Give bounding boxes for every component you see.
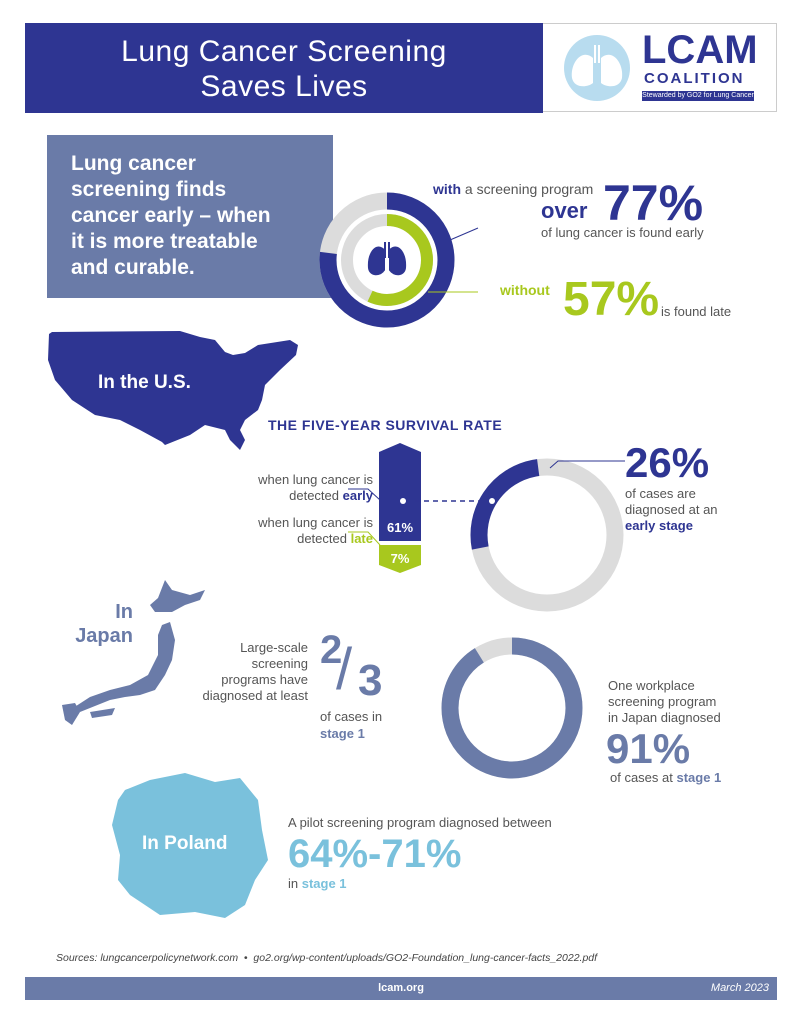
logo: Stewarded by GO2 for Lung Cancer (642, 92, 754, 99)
logo: COALITION (644, 70, 744, 87)
91% text: in Japan diagnosed (608, 710, 721, 725)
26% text (625, 439, 718, 533)
survival bar: 61% (387, 520, 413, 535)
26% text: of cases are (625, 486, 696, 501)
early label: detected early (289, 488, 373, 503)
Poland text: A pilot screening program diagnosed between (288, 815, 552, 830)
title: Saves Lives (200, 70, 368, 103)
91% text: screening program (608, 694, 716, 709)
Poland text: in stage 1 (288, 876, 347, 891)
26% text: diagnosed at an (625, 502, 718, 517)
with text: of lung cancer is found early (541, 225, 704, 240)
footer: March 2023 (711, 982, 769, 994)
26% text: early stage (625, 518, 693, 533)
text: 2 (320, 628, 342, 672)
survival heading: THE FIVE-YEAR SURVIVAL RATE (268, 417, 502, 433)
intro box: Lung cancer screening finds cancer early – when it is more treatable and curable. (71, 152, 271, 279)
title (25, 23, 543, 113)
title: Lung Cancer Screening (121, 35, 447, 68)
text: stage 1 (320, 726, 365, 741)
2/3 text: Large-scale screening programs have diagnosed at least (202, 640, 308, 703)
Poland text: 64%-71% (288, 832, 461, 876)
without text (500, 273, 731, 326)
logo: LCAM (642, 28, 758, 72)
logo (564, 28, 758, 101)
without text: without (500, 282, 550, 298)
Japan map: In (115, 601, 133, 623)
text: 3 (358, 656, 382, 705)
late label: detected late (297, 531, 373, 546)
survival bar (348, 443, 479, 573)
Poland map (112, 773, 268, 918)
text: 91% (606, 725, 690, 772)
late label (258, 515, 373, 546)
survival bar: 7% (391, 551, 410, 566)
US map (48, 331, 298, 450)
intro box (47, 135, 333, 298)
Poland map: In Poland (142, 833, 228, 854)
with text: with a screening program (433, 181, 593, 197)
US map: In the U.S. (98, 372, 191, 393)
text: of cases in (320, 709, 382, 724)
without text: is found late (661, 304, 731, 319)
text: / (336, 637, 352, 702)
Japan map (62, 580, 205, 725)
early label (258, 472, 373, 503)
Poland text (288, 815, 552, 891)
text: of cases at stage 1 (610, 770, 721, 785)
footer (25, 977, 777, 1000)
late label: when lung cancer is (258, 515, 373, 530)
footer: lcam.org (378, 982, 424, 994)
header border (25, 23, 777, 112)
with text: 77% (603, 175, 703, 231)
donut 26% (470, 458, 625, 612)
91% text (608, 678, 721, 725)
91% text: One workplace (608, 678, 695, 693)
with text: over (541, 198, 587, 223)
sources: Sources: lungcancerpolicynetwork.com • go2.org/wp-content/uploads/GO2-Foundation_lung-cancer-facts_2022.pdf (56, 952, 597, 964)
with text (433, 175, 704, 240)
early label: when lung cancer is (258, 472, 373, 487)
Japan donut (442, 638, 582, 778)
without text: 57% (563, 273, 659, 326)
Japan map: Japan (75, 625, 133, 647)
26% text: 26% (625, 439, 709, 486)
donut: screening program (320, 192, 478, 328)
